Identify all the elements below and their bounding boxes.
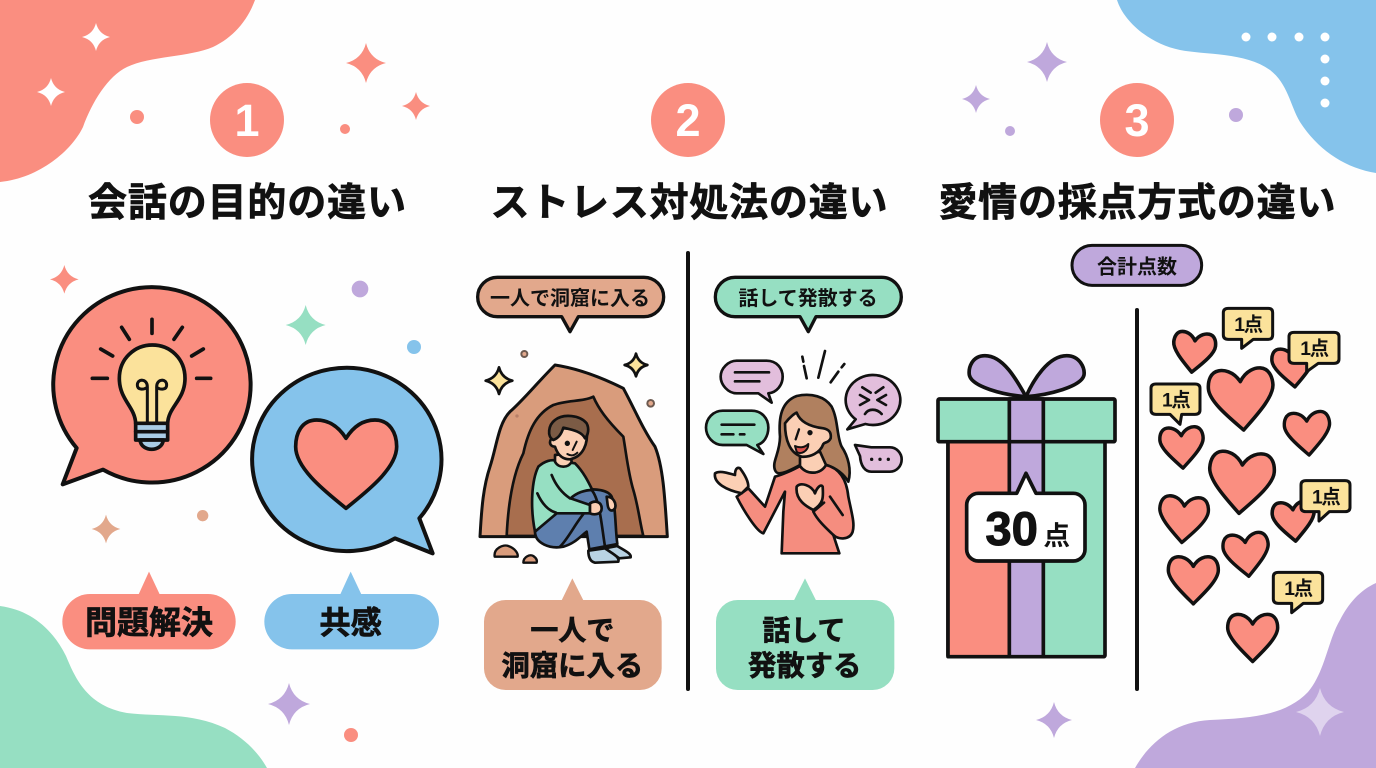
point tag 1: 1点: [1234, 314, 1263, 336]
speech label: cave: 一人で洞窟に入る: [490, 287, 650, 310]
point tag 2: [1289, 332, 1339, 372]
speech label: talk: [715, 277, 901, 332]
background blob: purple bottom-right: [1135, 583, 1376, 768]
point tag 3: 1点: [1162, 390, 1190, 412]
label: total score: [1072, 245, 1202, 285]
illustration: man sitting in cave: [480, 351, 667, 563]
speech label: talk: 話して発散する: [738, 287, 878, 310]
label: total score: 合計点数: [1097, 255, 1177, 278]
panel divider: [1135, 310, 1139, 689]
box body: [948, 442, 1105, 657]
score tag: [967, 473, 1085, 561]
scattered hearts: [1158, 331, 1332, 661]
number badge 2: 2: [675, 95, 701, 146]
score tag: 点: [1043, 521, 1070, 551]
number badge 3: 3: [1124, 95, 1150, 146]
point tag 2: 1点: [1300, 338, 1329, 360]
point tag 1: [1223, 308, 1273, 348]
label: alone in cave: 洞窟に入る: [502, 650, 643, 682]
icon: blue speech bubble with heart: [252, 368, 441, 553]
number badge 1: 1: [234, 95, 260, 146]
panel: affection scoring: [938, 245, 1350, 661]
label: talk it out: [716, 578, 894, 690]
panel: conversation purpose: [50, 265, 441, 649]
cave: [480, 365, 667, 537]
man: [532, 416, 631, 563]
woman: [715, 395, 853, 553]
emphasis rays: [802, 351, 844, 382]
point tag 4: [1301, 481, 1350, 521]
label: alone in cave: [484, 578, 662, 690]
box lid: [938, 399, 1115, 442]
label: empathy: [264, 572, 439, 649]
label: alone in cave: 一人で: [530, 615, 614, 646]
panel: stress coping: [478, 277, 901, 690]
speech label: cave: [478, 277, 664, 332]
label: empathy: 共感: [319, 605, 382, 640]
label: problem solving: 問題解決: [85, 604, 213, 640]
point tag 4: 1点: [1312, 486, 1340, 508]
score tag: 30: [985, 503, 1038, 556]
point tag 5: 1点: [1284, 578, 1313, 600]
small sparkles and dots: [50, 265, 421, 543]
heading 3: 愛情の採点方式の違い: [938, 182, 1336, 225]
number badge 1: [210, 83, 284, 157]
heading 2: ストレス対処法の違い: [490, 182, 888, 225]
number badge 3: [1100, 83, 1174, 157]
point tag 3: [1151, 384, 1200, 424]
icon: coral speech bubble with light bulb: [53, 287, 251, 484]
point tag 5: [1273, 572, 1323, 613]
background blob: mint bottom-left: [0, 606, 267, 768]
label: problem solving: [62, 572, 236, 649]
panel divider: [686, 253, 690, 689]
label: talk it out: 発散する: [748, 650, 861, 682]
label: talk it out: 話して: [762, 615, 846, 646]
heading 1: 会話の目的の違い: [88, 182, 406, 225]
illustration: woman talking with speech bubbles: [706, 351, 902, 553]
background blob: blue top-right: [1117, 0, 1376, 173]
icon: gift box: [938, 356, 1115, 657]
background blob: coral top-left: [0, 0, 255, 182]
bow: [969, 356, 1026, 397]
speech bubbles: [706, 361, 902, 472]
sparkles and rocks: [486, 351, 654, 563]
number badge 2: [651, 83, 725, 157]
icon: light bulb: [92, 319, 211, 449]
ellipsis dots: [870, 458, 890, 461]
